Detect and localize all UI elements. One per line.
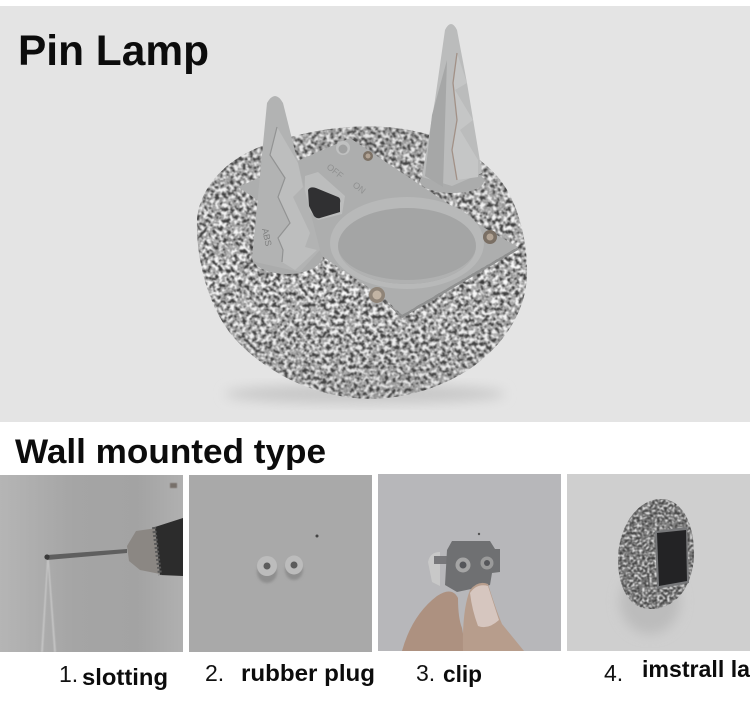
photo: installed lamp on the wall [567, 474, 750, 651]
caption: step 2 rubber plug: rubber plug [241, 660, 375, 686]
left pin [252, 96, 322, 274]
heading: Wall mounted type: Wall mounted type [15, 433, 326, 471]
mounting plate: ON [351, 180, 368, 196]
caption: step 4 install lamp: 4. [604, 660, 623, 686]
caption: step 3 clip: clip [443, 661, 482, 687]
icon: granite pin lamp [190, 24, 535, 405]
caption: step 1 slotting: 1. [59, 661, 78, 687]
icon: drill [41, 518, 183, 652]
icon: rubber plugs [257, 534, 318, 583]
photo: rubber plugs in the wall [189, 475, 372, 652]
icon: installed lamp [618, 499, 694, 634]
caption: step 3 clip [416, 660, 482, 687]
caption: step 4 install lamp [604, 656, 750, 686]
title: Pin Lamp: Pin Lamp [18, 28, 209, 75]
photo: drilling the wall [0, 475, 183, 652]
left pin: ABS [260, 227, 274, 247]
caption: step 1 slotting: slotting [82, 664, 168, 690]
caption: step 2 rubber plug: 2. [205, 660, 224, 686]
mounting plate [238, 138, 518, 318]
icon: clip held by fingers [402, 541, 524, 651]
right pin [420, 24, 484, 193]
mounting plate: OFF [325, 162, 346, 181]
caption: step 1 slotting [59, 661, 168, 690]
caption: step 4 install lamp: imstrall la [642, 656, 750, 682]
caption: step 3 clip: 3. [416, 660, 435, 686]
panel: hero product photo [0, 6, 750, 422]
photo: fitting the clip [378, 474, 561, 651]
